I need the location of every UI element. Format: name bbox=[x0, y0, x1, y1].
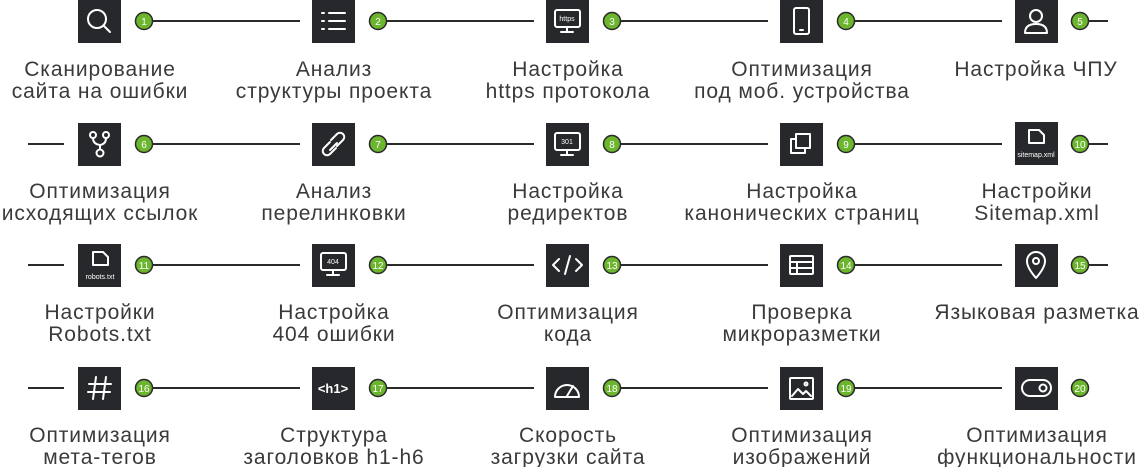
step 18: speed: Скорость bbox=[519, 424, 617, 447]
step 11: robots: 11 bbox=[139, 261, 150, 272]
step 7: linking: 7 bbox=[375, 140, 381, 151]
step 4: mobile: под моб. устройства bbox=[694, 80, 910, 103]
step 6: outgoing links: исходящих ссылок bbox=[2, 202, 198, 225]
step 1: scan bbox=[12, 0, 188, 103]
step 8: redirects bbox=[508, 123, 628, 225]
step 14: microdata: Проверка bbox=[751, 301, 853, 324]
step 20: functionality bbox=[937, 367, 1137, 467]
step 11: robots: robots.txt bbox=[86, 274, 114, 281]
step 14: microdata bbox=[722, 244, 882, 346]
step 13: code: Оптимизация bbox=[497, 301, 639, 324]
step 5: CNC bbox=[954, 0, 1118, 81]
step 18: speed bbox=[491, 367, 645, 467]
step 15: language: 15 bbox=[1074, 261, 1086, 272]
step 1: scan: 1 bbox=[141, 17, 147, 28]
step 3: https: https протокола bbox=[486, 80, 650, 103]
step 10: sitemap: Sitemap.xml bbox=[974, 202, 1100, 225]
step 17: headings: Структура bbox=[280, 424, 388, 447]
step 10: sitemap: 10 bbox=[1074, 140, 1086, 151]
step 12: 404 bbox=[272, 244, 396, 346]
step 3: https: https bbox=[559, 16, 575, 23]
step 17: headings: 17 bbox=[372, 384, 384, 395]
step 4: mobile: Оптимизация bbox=[731, 58, 873, 81]
step 14: microdata: 14 bbox=[840, 261, 852, 272]
step 1: scan: сайта на ошибки bbox=[12, 80, 188, 103]
step 17: headings: <h1> bbox=[318, 381, 349, 396]
step 20: functionality: Оптимизация bbox=[966, 424, 1108, 447]
step 19: images: 19 bbox=[840, 384, 852, 395]
step 7: linking: перелинковки bbox=[261, 202, 407, 225]
step 8: redirects: редиректов bbox=[508, 202, 628, 225]
step 8: redirects: Настройка bbox=[512, 180, 624, 203]
step 12: 404: 404 bbox=[327, 259, 339, 266]
step 1: scan: Сканирование bbox=[24, 58, 176, 81]
step 6: outgoing links bbox=[2, 123, 198, 225]
step 17: headings bbox=[243, 367, 425, 467]
step 3: https: Настройка bbox=[512, 58, 624, 81]
step 19: images bbox=[731, 367, 873, 467]
step 9: canonical: канонических страниц bbox=[684, 202, 920, 225]
step 20: functionality: 20 bbox=[1074, 384, 1086, 395]
step 6: outgoing links: 6 bbox=[141, 140, 147, 151]
step 16: meta tags bbox=[29, 367, 171, 467]
step 7: linking bbox=[261, 123, 407, 225]
step 11: robots: Настройки bbox=[44, 301, 156, 324]
step 8: redirects: 8 bbox=[609, 140, 615, 151]
step 11: robots bbox=[44, 244, 156, 346]
step 7: linking: Анализ bbox=[296, 180, 372, 203]
step 16: meta tags: 16 bbox=[138, 384, 150, 395]
step 9: canonical: Настройка bbox=[746, 180, 858, 203]
step 2: structure: Анализ bbox=[296, 58, 372, 81]
step 3: https: 3 bbox=[609, 17, 615, 28]
step 15: language bbox=[934, 244, 1139, 324]
step 16: meta tags: Оптимизация bbox=[29, 424, 171, 447]
step 15: language: Языковая разметка bbox=[934, 301, 1139, 324]
step 8: redirects: 301 bbox=[561, 139, 573, 146]
step 13: code: кода bbox=[544, 323, 592, 346]
step 2: structure: 2 bbox=[375, 17, 381, 28]
step 10: sitemap: Настройки bbox=[981, 180, 1093, 203]
step 4: mobile bbox=[694, 0, 910, 103]
step 14: microdata: микроразметки bbox=[722, 323, 882, 346]
step 3: https bbox=[486, 0, 650, 103]
step 5: CNC: 5 bbox=[1077, 17, 1083, 28]
step 9: canonical: 9 bbox=[843, 140, 849, 151]
step 12: 404: 404 ошибки bbox=[272, 323, 396, 346]
step 12: 404: Настройка bbox=[278, 301, 390, 324]
step 4: mobile: 4 bbox=[843, 17, 849, 28]
step 10: sitemap: sitemap.xml bbox=[1017, 152, 1055, 159]
step 18: speed: 18 bbox=[606, 384, 618, 395]
step 2: structure bbox=[236, 0, 432, 103]
step 6: outgoing links: Оптимизация bbox=[29, 180, 171, 203]
step 10: sitemap bbox=[974, 122, 1100, 225]
step 2: structure: структуры проекта bbox=[236, 80, 432, 103]
step 11: robots: Robots.txt bbox=[48, 323, 152, 346]
step 13: code bbox=[497, 244, 639, 346]
step 13: code: 13 bbox=[606, 261, 618, 272]
step 12: 404: 12 bbox=[372, 261, 384, 272]
step 9: canonical bbox=[684, 123, 920, 225]
step 5: CNC: Настройка ЧПУ bbox=[954, 58, 1118, 81]
step 19: images: Оптимизация bbox=[731, 424, 873, 447]
